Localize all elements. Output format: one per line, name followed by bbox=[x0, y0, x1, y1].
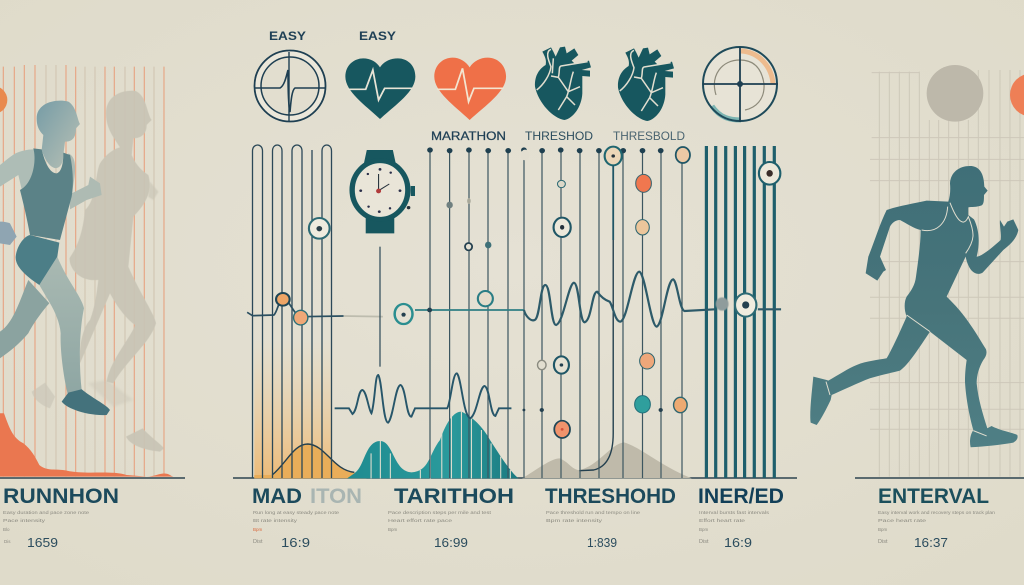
text block: INERVED: Dist bbox=[699, 539, 709, 545]
heading: EASY two: EASY bbox=[359, 29, 396, 43]
icon: watch bbox=[352, 150, 415, 233]
heading: MARATHON: MARATHON bbox=[431, 129, 506, 143]
hill outline bbox=[272, 444, 354, 475]
mini ecg bbox=[335, 373, 511, 423]
text block: RUNNHON: Dis bbox=[4, 539, 11, 544]
text block: TARITHOH: Pace description steps per mile and test bbox=[388, 510, 492, 515]
text block: INERVED: Effort heart rate bbox=[699, 518, 746, 523]
J curve bbox=[579, 220, 613, 471]
text block: ENTERVAL: Pace heart rate bbox=[878, 518, 927, 523]
text block: RUNNHON: Easy duration and pace zone note bbox=[3, 510, 90, 515]
shorts bbox=[16, 235, 59, 285]
heading: THRESHOD: THRESHOD bbox=[525, 129, 593, 143]
gray ball bbox=[927, 65, 983, 122]
gray hills bbox=[522, 442, 692, 478]
text block: MADITON: Bt rate intensity bbox=[253, 518, 298, 523]
icon: teal heart bbox=[345, 58, 415, 119]
text block: RUNNHON bbox=[3, 485, 119, 550]
top row: pins, hearts and watch bbox=[309, 58, 780, 240]
rear runner silhouette bbox=[32, 91, 164, 452]
text block: MADITON: ITON bbox=[310, 485, 362, 508]
text block: MADITON: Run long at easy steady pace note bbox=[253, 510, 340, 515]
head and neck bbox=[37, 101, 80, 168]
text block: MADITON: Dist bbox=[253, 539, 263, 545]
teal hills bbox=[347, 412, 519, 478]
text block: TARITHOH: Heart effort rate pace bbox=[388, 518, 453, 523]
text block: THRESHOHD: Bpm rate intensity bbox=[546, 518, 603, 523]
easy zone lines bbox=[252, 145, 332, 478]
text block: MADITON: Bpm bbox=[253, 527, 263, 532]
heading: THRESBOLD: THRESBOLD bbox=[613, 129, 685, 143]
front runner silhouette bbox=[0, 101, 110, 415]
peach band bbox=[254, 340, 331, 478]
shoe bbox=[62, 389, 110, 415]
text block: TARITHOH: 16:99 bbox=[434, 535, 468, 550]
hand bbox=[0, 222, 17, 245]
main wave bbox=[247, 298, 344, 317]
runner silhouette bbox=[810, 166, 1018, 447]
icon: anatomical heart two bbox=[618, 48, 674, 121]
text block: ENTERVAL: Dist bbox=[878, 539, 888, 545]
orange ball bbox=[1010, 73, 1024, 117]
icon: ECG circle bbox=[254, 50, 326, 122]
text block: RUNNHON: 1659 bbox=[27, 535, 58, 550]
text block: INERVED: INER/ED bbox=[698, 485, 784, 508]
text block: INERVED bbox=[698, 485, 784, 550]
singlet bbox=[20, 148, 73, 240]
watch drop line bbox=[379, 247, 381, 367]
text block: RUNNHON: Blo bbox=[3, 527, 10, 532]
back arm bbox=[68, 153, 102, 209]
orange ball bbox=[0, 86, 7, 114]
legs bbox=[39, 257, 84, 397]
text block: RUNNHON: RUNNHON bbox=[3, 485, 119, 508]
text block: TARITHOH bbox=[388, 485, 514, 550]
text block: ENTERVAL: Easy interval work and recovery steps on track plan bbox=[878, 510, 996, 515]
grid bbox=[870, 70, 1024, 477]
upper nodes bbox=[309, 147, 780, 240]
icon: orange heart bbox=[434, 58, 506, 120]
text block: RUNNHON: Pace intensity bbox=[3, 518, 46, 523]
chart: rhythm lines and hills bbox=[254, 220, 692, 478]
pin lines bbox=[430, 150, 682, 478]
text block: ENTERVAL bbox=[878, 485, 996, 550]
yellow hill bbox=[254, 444, 367, 478]
text block: THRESHOHD bbox=[545, 485, 676, 550]
white hill stripes bbox=[371, 412, 510, 478]
text block: ENTERVAL: Bpm bbox=[878, 527, 888, 532]
lead arm bbox=[0, 149, 40, 189]
interval thick lines bbox=[706, 146, 774, 478]
orange grid lines bbox=[3, 65, 164, 477]
text block: INERVED: Bpm bbox=[699, 527, 709, 532]
heart rate waves and nodes bbox=[247, 242, 781, 438]
panel: left runners bbox=[0, 65, 173, 477]
text block: MADITON: MAD bbox=[252, 485, 302, 508]
text block: THRESHOHD: 1:839 bbox=[587, 535, 617, 550]
singlet outline bbox=[826, 203, 987, 436]
orange area bbox=[0, 413, 173, 477]
text block: TARITHOH: Bpm bbox=[388, 527, 398, 532]
panel: right runner bbox=[810, 65, 1024, 477]
text block: THRESHOHD: Pace threshold run and tempo on line bbox=[546, 510, 641, 515]
nodes bbox=[276, 242, 756, 438]
line pin heads bbox=[427, 147, 664, 153]
text block: ENTERVAL: 16:37 bbox=[914, 535, 948, 550]
heading: EASY one: EASY bbox=[269, 29, 306, 43]
icon: crosshair circle bbox=[703, 47, 778, 122]
text block: TARITHOH: TARITHOH bbox=[394, 485, 514, 508]
text block: MADITON bbox=[252, 485, 362, 550]
text block: THRESHOHD: THRESHOHD bbox=[545, 485, 676, 508]
text block: INERVED: 16:9 bbox=[724, 535, 752, 550]
icon: anatomical heart one bbox=[535, 47, 591, 120]
baseline bbox=[0, 477, 1024, 479]
text block: ENTERVAL: ENTERVAL bbox=[878, 485, 989, 508]
text block: INERVED: Interval bursts fast intervals bbox=[699, 510, 770, 515]
text block: MADITON: 16:9 bbox=[281, 535, 310, 550]
